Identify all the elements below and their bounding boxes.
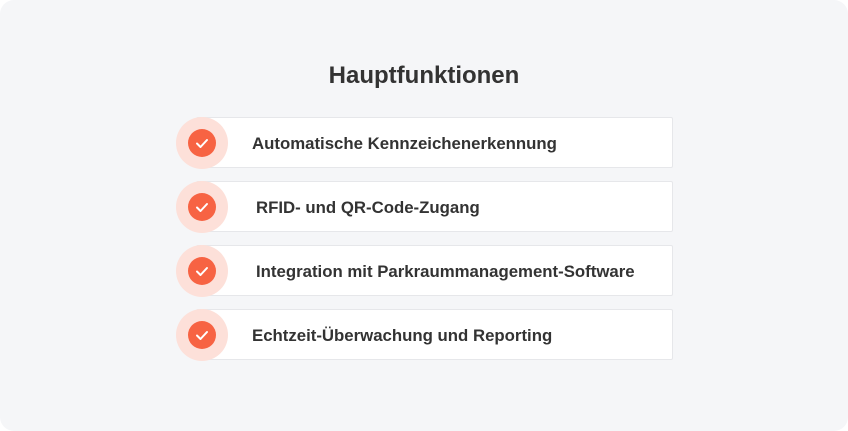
icon: check [176,181,228,233]
icon: check [176,117,228,169]
title: Hauptfunktionen [329,62,519,89]
item: RFID: RFID- und QR-Code-Zugang [256,198,480,217]
item: RFID [176,181,673,233]
item: Automatische Kennzeichenerkennung: Automatische Kennzeichenerkennung [252,134,557,153]
item: Integration [176,245,673,297]
item: Echtzeit [176,309,673,361]
icon: check [176,309,228,361]
item: Automatische Kennzeichenerkennung [176,117,673,169]
item: Integration: Integration mit Parkraummanagement-Software [256,262,635,281]
item: Echtzeit: Echtzeit-Überwachung und Reporting [252,326,552,345]
icon: check [176,245,228,297]
